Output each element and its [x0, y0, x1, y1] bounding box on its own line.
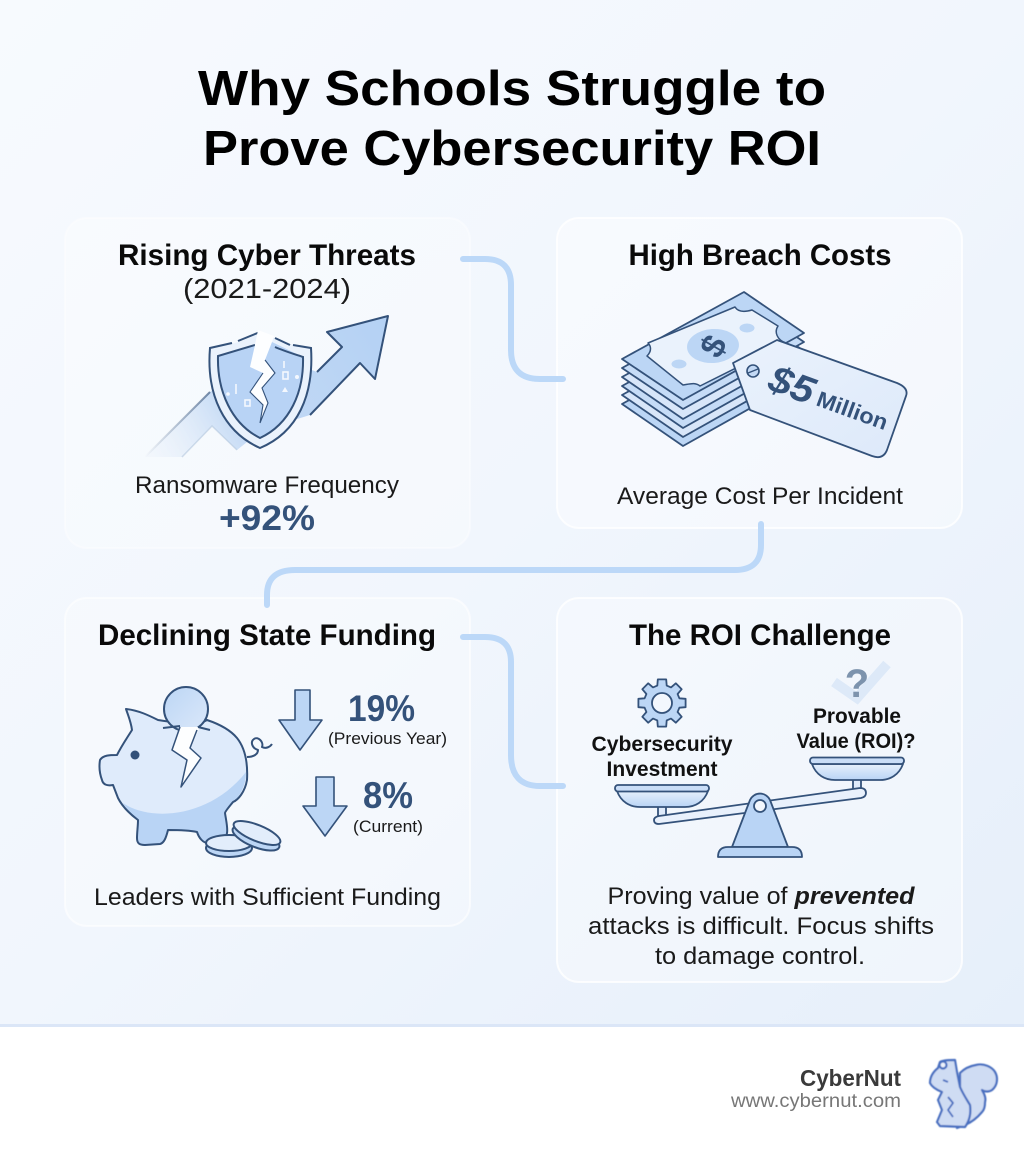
arrow: down previous year	[279, 690, 322, 750]
label: cybersecurity investment: Cybersecurity	[592, 732, 733, 756]
subheading: years: (2021-2024)	[183, 273, 351, 304]
label: current: (Current)	[353, 817, 423, 836]
title	[198, 62, 826, 176]
title: Prove Cybersecurity ROI	[203, 122, 821, 176]
arrow: down current	[303, 777, 347, 836]
stat: 8%: 8%	[363, 775, 413, 816]
heading: declining state funding: Declining State Funding	[98, 619, 436, 652]
icon: balance scale	[615, 758, 904, 857]
label: cybersecurity investment	[592, 732, 733, 781]
icon: question and check	[834, 662, 887, 706]
brand name: CyberNut	[800, 1065, 901, 1091]
text: proving value: to damage control.	[655, 943, 865, 970]
label: average cost: Average Cost Per Incident	[617, 483, 903, 510]
icon: broken piggy bank	[99, 687, 283, 857]
text: proving value	[588, 883, 934, 970]
icon: squirrel logo	[930, 1060, 997, 1128]
icon: gear	[638, 679, 686, 727]
heading: the roi challenge: The ROI Challenge	[629, 619, 891, 652]
arrow: connector threats to costs	[463, 259, 563, 379]
panel: rising cyber threats	[65, 218, 470, 548]
icon: price tag: Million	[813, 386, 891, 435]
text: proving value: attacks is difficult. Focus shifts	[588, 913, 934, 940]
icon: rising arrow and cracked shield	[145, 316, 388, 457]
panel: high breach costs	[557, 218, 962, 528]
label: leaders with sufficient funding: Leaders with Sufficient Funding	[94, 884, 441, 911]
icon: question and check: ?	[845, 662, 869, 706]
icon: cash stack	[622, 292, 804, 446]
heading: rising cyber threats: Rising Cyber Threats	[118, 239, 416, 272]
website: www.cybernut.com	[730, 1091, 901, 1112]
arrow: connector funding to roi	[463, 637, 563, 786]
icon: cash stack: $	[693, 329, 735, 364]
panel: the roi challenge	[557, 598, 962, 982]
label: ransomware frequency: Ransomware Frequency	[135, 472, 399, 499]
icon: price tag: $5	[762, 358, 821, 414]
label: provable value	[796, 704, 916, 753]
stat: +92%: +92%	[219, 499, 315, 538]
label: provable value: Value (ROI)?	[796, 729, 916, 753]
title: Why Schools Struggle to	[198, 62, 826, 116]
text: proving value: Proving value of prevented	[608, 883, 916, 910]
panel: declining state funding	[65, 598, 470, 926]
stat: 19%: 19%	[348, 688, 415, 729]
icon: price tag	[733, 340, 907, 457]
arrow: connector costs to funding	[267, 524, 761, 605]
heading: high breach costs: High Breach Costs	[628, 239, 892, 272]
label: provable value: Provable	[813, 704, 901, 728]
label: previous year: (Previous Year)	[328, 729, 447, 748]
footer	[0, 1024, 1024, 1154]
label: cybersecurity investment: Investment	[606, 757, 718, 781]
